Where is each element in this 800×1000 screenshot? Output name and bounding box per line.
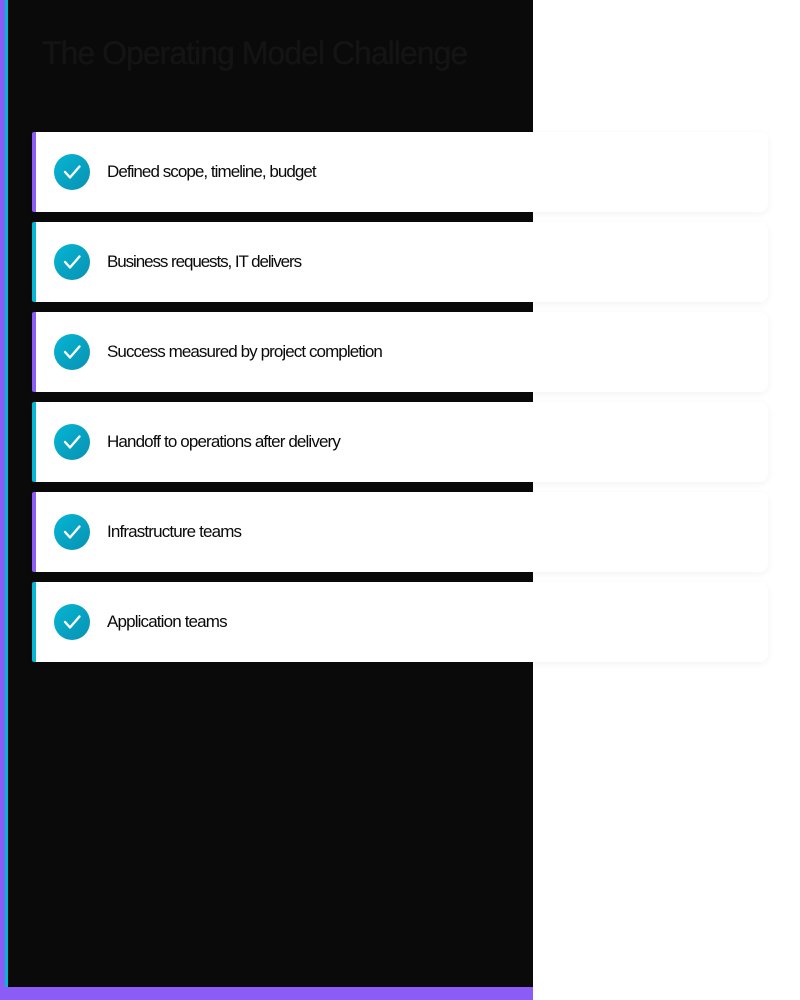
icon: check [54,244,90,280]
dark background panel [0,0,533,1000]
card text: Defined scope, timeline, budget [107,162,316,181]
card: defined scope [32,132,768,212]
icon: check [54,424,90,460]
icon: check [54,514,90,550]
card text: Handoff to operations after delivery [107,432,340,451]
bottom accent bar [0,987,533,1000]
left accent stripe: cyan [5,0,8,987]
card: application teams [32,582,768,662]
card: business requests [32,222,768,302]
card text: Business requests, IT delivers [107,252,301,271]
card: success measured [32,312,768,392]
card text: Infrastructure teams [107,522,241,541]
card text: Success measured by project completion [107,342,382,361]
left accent stripe: purple [0,0,5,1000]
card: handoff [32,402,768,482]
card: infrastructure teams [32,492,768,572]
card text: Application teams [107,612,227,631]
icon: check [54,604,90,640]
icon: check [54,334,90,370]
icon: check [54,154,90,190]
title: The Operating Model Challenge [42,35,467,71]
